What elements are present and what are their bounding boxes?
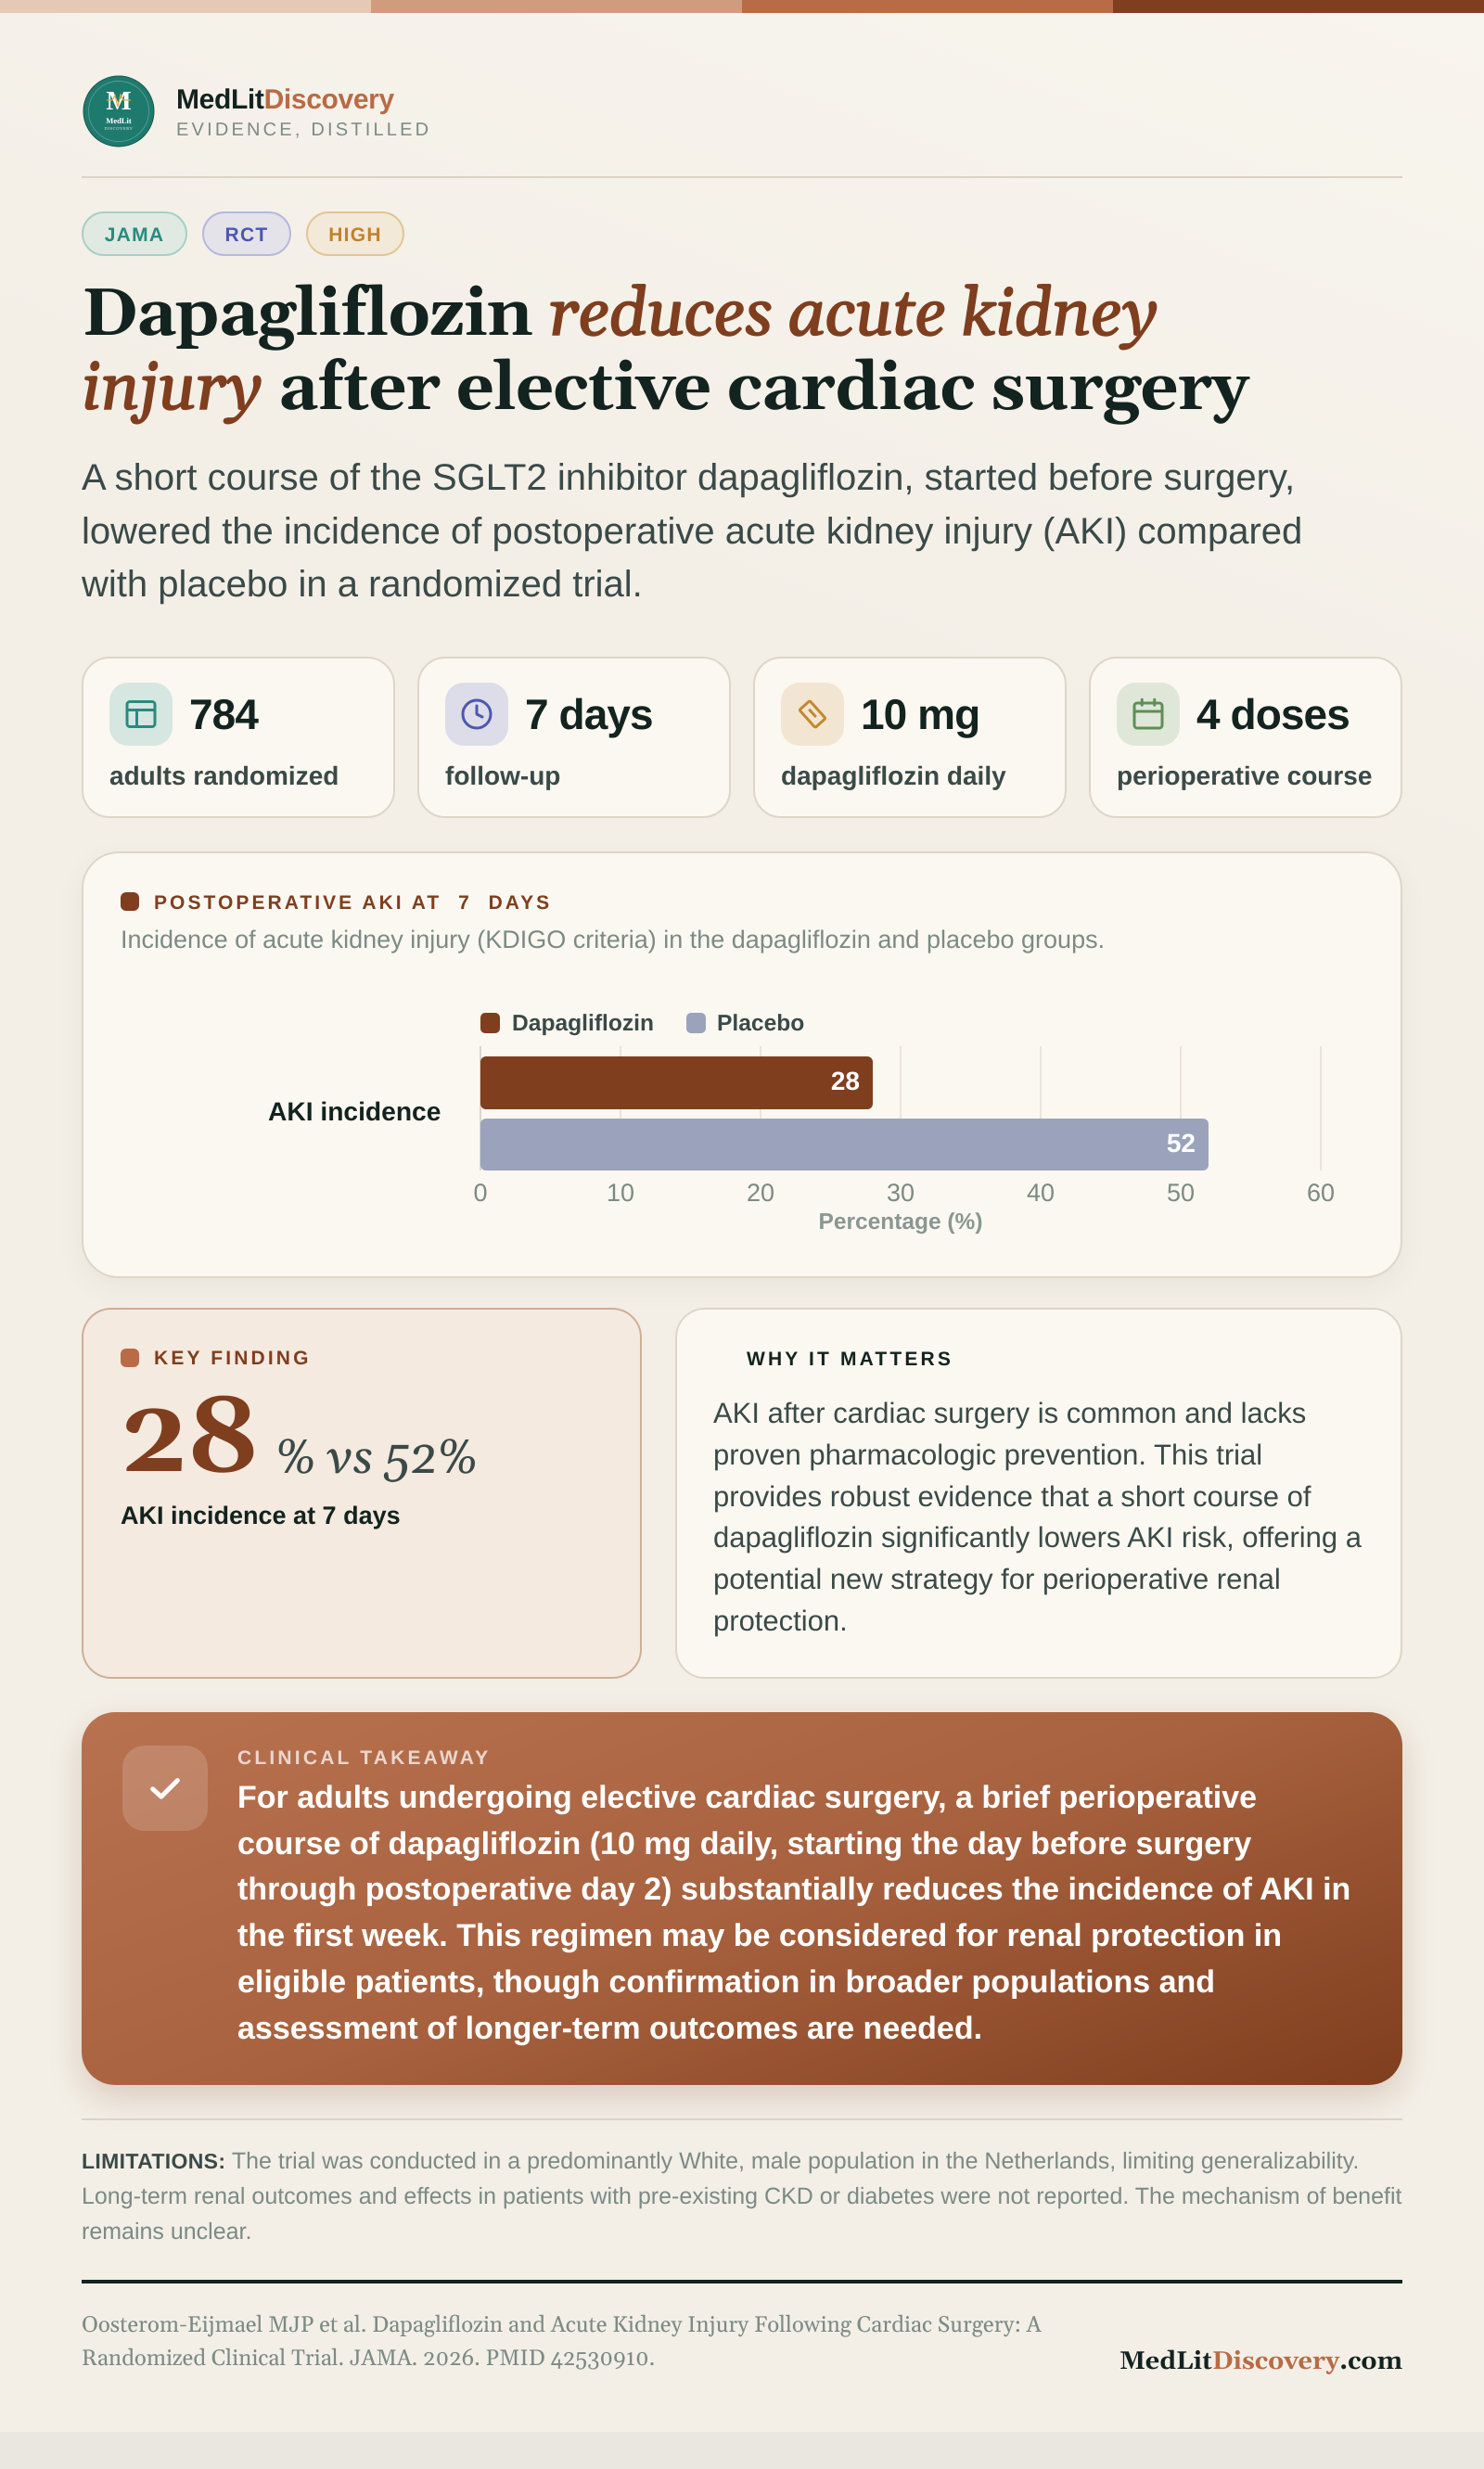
key finding comparison: % vs 52% [275, 1428, 477, 1490]
top colour band [0, 0, 1484, 13]
panel: chart: 10 [607, 1179, 634, 1207]
title: injury after elective cardiac surgery [82, 347, 1248, 432]
why it matters text: provides robust evidence that a short course of [713, 1480, 1311, 1513]
icon: clock [445, 683, 508, 746]
stat card: follow-up [417, 657, 731, 818]
takeaway text: the first week. This regimen may be considered for renal protection in [237, 1918, 1282, 1953]
panel: chart: 30 [887, 1179, 915, 1207]
citation [82, 2311, 1042, 2373]
takeaway text: assessment of longer-term outcomes are needed. [237, 2011, 982, 2046]
chart heading marker [121, 892, 139, 911]
icon: check [122, 1746, 208, 1831]
icon: MedLitDiscovery logo [83, 76, 154, 147]
stat card: adults randomized [82, 657, 395, 818]
brand name: MedLitDiscovery [176, 84, 394, 115]
panel: chart: 50 [1167, 1179, 1195, 1207]
badge: HIGH [306, 211, 404, 256]
panel: chart: 60 [1307, 1179, 1335, 1207]
row label: AKI incidence [268, 1096, 441, 1126]
stat card: adults randomized: 784 [189, 690, 258, 738]
stat card: dose [753, 657, 1067, 818]
citation: Randomized Clinical Trial. JAMA. 2026. PMID 42530910. [82, 2345, 655, 2373]
why it matters text: protection. [713, 1605, 848, 1637]
limitations [82, 2148, 1402, 2245]
panel: clinical takeaway [82, 1712, 1402, 2085]
icon: pill [781, 683, 844, 746]
why it matters text: proven pharmacologic prevention. This trial [713, 1439, 1262, 1471]
legend: dapagliflozin: Dapagliflozin [512, 1011, 654, 1035]
badge: HIGH: HIGH [328, 224, 382, 246]
subtitle [82, 457, 1302, 605]
why it matters heading: WHY IT MATTERS [747, 1349, 953, 1370]
panel: why it matters [675, 1308, 1402, 1679]
panel: chart: 20 [747, 1179, 774, 1207]
takeaway text [237, 1780, 1350, 2046]
takeaway text: eligible patients, though confirmation in broader populations and [237, 1964, 1215, 2000]
legend: placebo: Placebo [717, 1011, 804, 1035]
takeaway text: For adults undergoing elective cardiac surgery, a brief perioperative [237, 1780, 1257, 1815]
subtitle: with placebo in a randomized trial. [82, 564, 643, 605]
stat card: follow-up: follow-up [445, 761, 560, 790]
subtitle: lowered the incidence of postoperative acute kidney injury (AKI) compared [82, 511, 1302, 552]
icon: MedLitDiscovery logo: DISCOVERY [105, 126, 134, 131]
why it matters text [713, 1397, 1362, 1637]
panel: chart [82, 851, 1402, 1279]
chart heading: POSTOPERATIVE AKI AT 7 DAYS [154, 892, 552, 913]
key finding heading: KEY FINDING [154, 1348, 312, 1369]
takeaway text: through postoperative day 2) substantially reduces the incidence of AKI in [237, 1872, 1350, 1907]
why it matters text: potential new strategy for perioperative renal [713, 1563, 1281, 1595]
badge: JAMA: JAMA [105, 224, 164, 246]
badge: RCT: RCT [225, 224, 268, 246]
bar: dapagliflozin 28 [480, 1056, 873, 1109]
icon: table [109, 683, 173, 746]
limitations: remains unclear. [82, 2219, 251, 2245]
x axis ticks [473, 1179, 1335, 1207]
x axis title: Percentage (%) [818, 1209, 983, 1234]
badge: JAMA [82, 211, 187, 256]
badge: RCT [202, 211, 291, 256]
why it matters text: dapagliflozin significantly lowers AKI risk, offering a [713, 1521, 1362, 1554]
stat card: follow-up: 7 days [525, 690, 653, 738]
panel: key finding [82, 1308, 642, 1679]
stat card: doses: perioperative course [1117, 761, 1372, 790]
key finding number: 28 [121, 1373, 260, 1508]
citation: Oosterom-Eijmael MJP et al. Dapagliflozin and Acute Kidney Injury Following Cardiac Surgery: A [82, 2311, 1042, 2339]
key finding caption: AKI incidence at 7 days [121, 1501, 401, 1529]
tagline: EVIDENCE, DISTILLED [176, 120, 431, 140]
stat card: doses: 4 doses [1196, 690, 1350, 738]
bar: dapagliflozin 28: 28 [831, 1067, 860, 1095]
bar: placebo 52 [480, 1119, 1209, 1171]
stat card: doses [1089, 657, 1402, 818]
stat card: adults randomized: adults randomized [109, 761, 339, 790]
icon: MedLitDiscovery logo: M [106, 86, 132, 116]
stat card: dose: dapagliflozin daily [781, 761, 1006, 790]
icon: MedLitDiscovery logo: MedLit [106, 116, 132, 125]
limitations: Long-term renal outcomes and effects in patients with pre-existing CKD or diabetes were not reported. The mechanism of benefit [82, 2183, 1401, 2209]
why it matters text: AKI after cardiac surgery is common and lacks [713, 1397, 1306, 1429]
key finding marker [121, 1349, 139, 1367]
footer brand: MedLitDiscovery.com [1119, 2347, 1402, 2378]
panel: chart: 40 [1027, 1179, 1055, 1207]
stat card: dose: 10 mg [861, 690, 979, 738]
panel: chart: 0 [473, 1179, 488, 1207]
bar chart gridlines [480, 1046, 481, 1171]
title: Dapagliflozin reduces acute kidney [82, 273, 1158, 358]
chart description: Incidence of acute kidney injury (KDIGO criteria) in the dapagliflozin and placebo groups. [121, 926, 1105, 953]
title [82, 273, 1250, 432]
subtitle: A short course of the SGLT2 inhibitor dapagliflozin, started before surgery, [82, 457, 1295, 498]
bar: placebo 52: 52 [1167, 1129, 1196, 1158]
icon: calendar [1117, 683, 1180, 746]
limitations: LIMITATIONS: The trial was conducted in a predominantly White, male population in the Netherlands, limiting generalizability. [82, 2148, 1359, 2174]
takeaway text: course of dapagliflozin (10 mg daily, starting the day before surgery [237, 1826, 1251, 1861]
takeaway label: CLINICAL TAKEAWAY [237, 1747, 491, 1768]
